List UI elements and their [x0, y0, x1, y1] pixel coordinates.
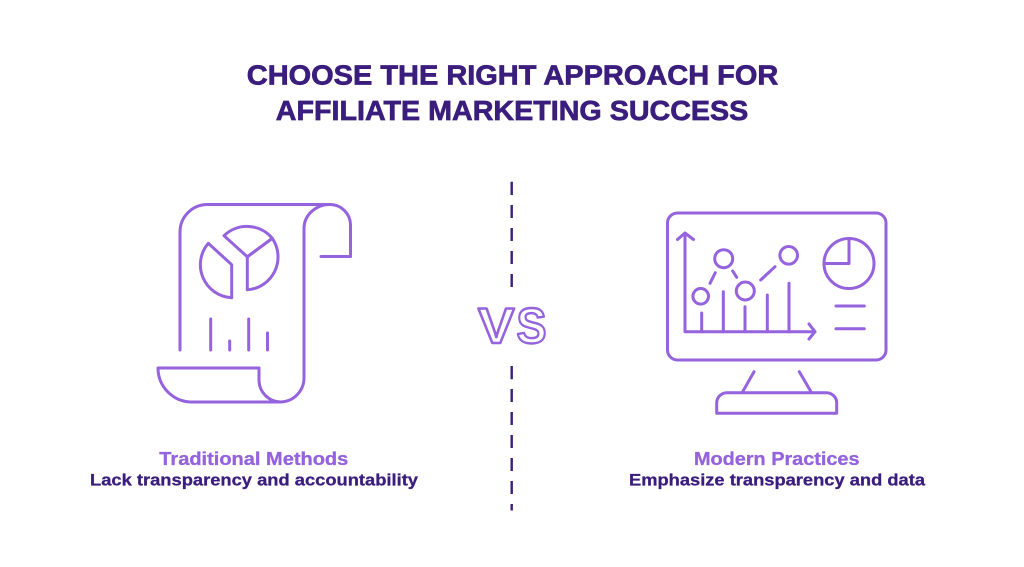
icon: paper scroll with pie chart	[158, 204, 350, 402]
title: AFFILIATE MARKETING SUCCESS	[276, 95, 748, 126]
icon: computer monitor with analytics	[668, 213, 886, 413]
label: traditional methods: Lack transparency and accountability	[90, 470, 419, 490]
legend lines	[836, 306, 864, 329]
line and bar chart	[678, 233, 815, 339]
monitor stand	[717, 372, 837, 413]
divider: upper dashes	[511, 182, 513, 287]
monitor screen	[668, 213, 886, 360]
VS badge: V	[478, 298, 515, 354]
title: CHOOSE THE RIGHT APPROACH FOR	[247, 60, 778, 90]
divider: lower dashes	[511, 366, 513, 510]
label: traditional methods: Traditional Methods	[159, 449, 348, 469]
label: modern practices: Modern Practices	[694, 449, 860, 469]
label: modern practices	[629, 449, 926, 490]
label: modern practices: Emphasize transparency and data	[629, 470, 926, 490]
title	[247, 60, 778, 126]
pie chart	[824, 238, 874, 288]
VS badge	[478, 298, 546, 354]
VS badge: S	[516, 298, 546, 354]
label: traditional methods	[90, 449, 419, 490]
